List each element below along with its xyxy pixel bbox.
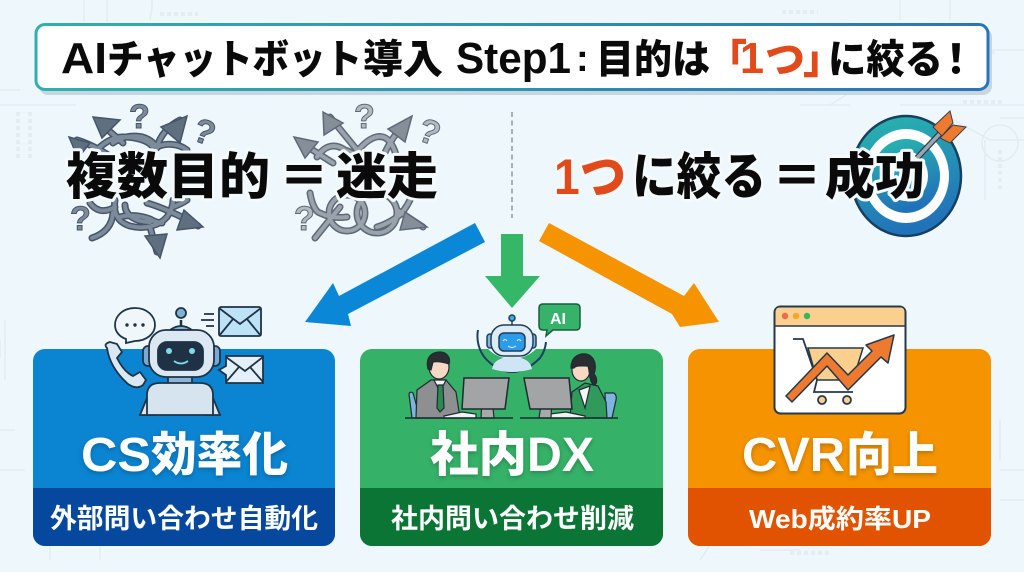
card subtitle: 社内問い合わせ削減 [391, 504, 634, 534]
card title: 効率化 [151, 428, 288, 481]
heading: focus on one = success [554, 149, 925, 205]
panel: DX [360, 304, 663, 546]
icon: tangled arrows, grey: ? [294, 200, 315, 238]
title banner: つ [765, 38, 805, 82]
heading: multiple goals = wandering: ＝ [279, 149, 329, 205]
card title: CVR [742, 429, 845, 482]
icon: tangled arrows, dark: ? [188, 111, 221, 154]
divider [511, 112, 513, 218]
panel: CVR [688, 306, 991, 546]
card title: CS [81, 429, 151, 482]
title banner: 「 [707, 38, 747, 82]
icon: tangled arrows, grey: ? [413, 111, 446, 154]
icon: tangled arrows, grey [294, 98, 446, 238]
icon: browser with cart and growth arrow [774, 306, 906, 414]
arrow: to DX [485, 234, 540, 308]
icon: AI robot [477, 304, 580, 372]
title banner: 目的は [596, 38, 710, 82]
card title [430, 429, 594, 482]
heading: multiple goals = wandering [66, 149, 438, 205]
title banner: に絞る [828, 38, 943, 82]
icon: tangled arrows, dark: ? [129, 98, 150, 136]
card subtitle: Web成約率UP [749, 504, 931, 534]
title banner: AI [61, 34, 107, 83]
arrow: to CS [305, 223, 485, 326]
title banner: ！ [936, 38, 976, 82]
title banner: 」 [803, 38, 843, 82]
card subtitle: 外部問い合わせ自動化 [50, 504, 318, 534]
icon: man at computer [405, 352, 513, 418]
icon: AI robot: AI [550, 311, 566, 328]
card title [81, 428, 288, 482]
card title: 社内 [430, 429, 527, 482]
title banner: : [576, 38, 589, 80]
panel: CS [33, 307, 335, 546]
heading: focus on one = success: 成功 [825, 149, 925, 205]
icon: tangled arrows, dark [69, 98, 221, 258]
icon: tangled arrows, grey: ? [354, 98, 375, 136]
icon: woman at computer [520, 354, 618, 418]
title banner: 導入 [363, 38, 443, 82]
icon: target with dart [851, 111, 966, 236]
heading: focus on one = success: ＝ [772, 149, 822, 205]
heading: focus on one = success: 1つ [554, 149, 626, 205]
title banner [36, 24, 992, 95]
title banner: チャットボット [107, 38, 362, 82]
card title: DX [527, 429, 594, 482]
card title: 向上 [846, 428, 938, 481]
heading: focus on one = success: に絞る [632, 149, 766, 205]
heading: multiple goals = wandering: 複数目的 [66, 149, 270, 205]
card title [742, 428, 938, 482]
arrow: to CVR [539, 223, 719, 327]
title banner: 1 [740, 34, 764, 83]
icon: tangled arrows, dark: ? [70, 200, 91, 238]
title banner: Step1 [456, 34, 571, 83]
panel: multiple goals [66, 98, 446, 258]
heading: multiple goals = wandering: 迷走 [336, 149, 438, 205]
icon: support robot [106, 307, 263, 415]
panel: focus on one [554, 111, 966, 236]
